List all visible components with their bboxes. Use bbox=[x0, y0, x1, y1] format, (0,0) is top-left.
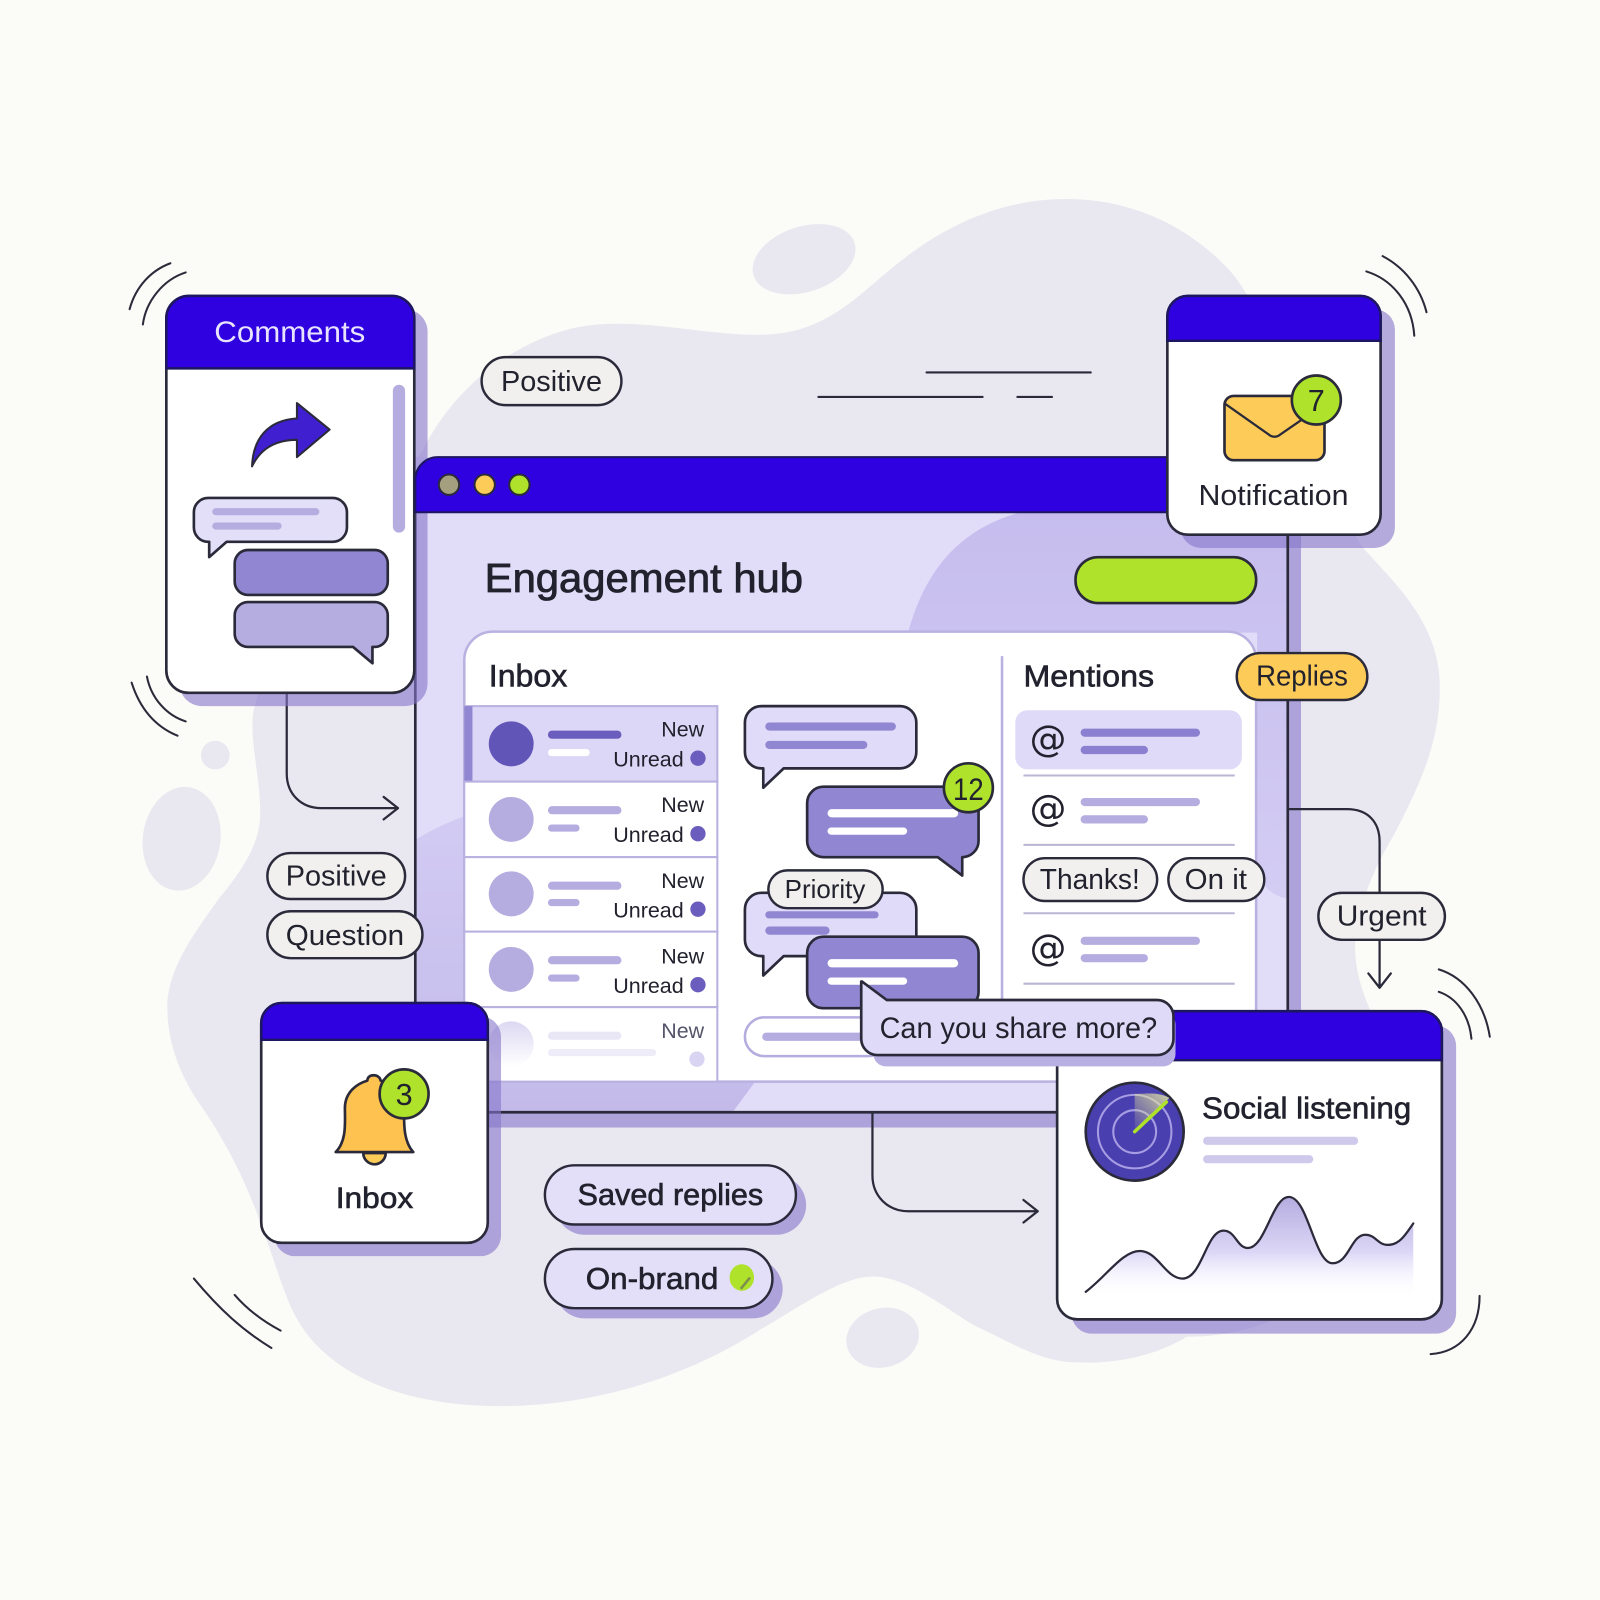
decorative short lines bbox=[818, 372, 1091, 397]
tag: Question bbox=[267, 911, 422, 958]
window outline lines bbox=[415, 512, 1288, 1112]
inbox row 2 bbox=[464, 782, 717, 857]
chip: Thanks! bbox=[1023, 858, 1157, 901]
window control dots bbox=[439, 474, 530, 495]
pill: Saved replies bbox=[545, 1165, 806, 1235]
main window: Engagement hub bbox=[415, 457, 1301, 1128]
icon: envelope bbox=[1224, 396, 1324, 460]
mention row 2: @ bbox=[1030, 786, 1066, 829]
connector: comments to window bbox=[287, 693, 398, 819]
tag: Replies bbox=[1237, 653, 1367, 700]
inbox row 1: New bbox=[661, 718, 705, 742]
inbox heading: Inbox bbox=[489, 658, 568, 694]
badge: 3: 3 bbox=[396, 1078, 413, 1112]
card: Notification bbox=[1167, 296, 1395, 548]
window body bbox=[415, 457, 1288, 1112]
area chart bbox=[1086, 1197, 1413, 1298]
inbox row 4: Unread bbox=[613, 974, 684, 998]
green action button bbox=[1076, 557, 1256, 603]
icon: green leaf bbox=[730, 1264, 754, 1291]
inbox row 1 bbox=[464, 706, 717, 782]
card: Notification: Notification bbox=[1198, 480, 1348, 512]
badge: 7: 7 bbox=[1308, 384, 1325, 418]
card: Comments: Comments bbox=[214, 316, 365, 349]
chat bubble 4 bbox=[807, 937, 979, 1008]
tag: Question: Question bbox=[286, 920, 404, 952]
background blobs bbox=[136, 199, 1440, 1406]
inbox list bbox=[464, 706, 717, 1082]
pill: On-brand: On-brand bbox=[586, 1262, 718, 1296]
icon: radar bbox=[1086, 1083, 1184, 1181]
tag: Priority bbox=[768, 870, 883, 908]
small bubble bbox=[194, 498, 347, 557]
tag: Replies: Replies bbox=[1256, 661, 1348, 693]
mention row highlighted bbox=[1015, 710, 1242, 769]
chat bubble 3 bbox=[745, 893, 916, 976]
connector: replies to urgent bbox=[1288, 809, 1391, 988]
tag: Positive (left) bbox=[267, 853, 405, 899]
icon: bell bbox=[336, 1075, 413, 1164]
inbox row 3 bbox=[464, 857, 717, 932]
inbox row 3: New bbox=[661, 869, 705, 893]
badge: 12 bbox=[944, 763, 993, 812]
tag: Positive (top): Positive bbox=[501, 366, 602, 398]
callout: Can you share more?: Can you share more? bbox=[880, 1012, 1157, 1045]
chip: Thanks!: Thanks! bbox=[1040, 864, 1140, 896]
chat thread bbox=[745, 706, 993, 1056]
icon: share arrow bbox=[252, 403, 330, 466]
chip: On it: On it bbox=[1185, 864, 1247, 896]
scrollbar bbox=[393, 385, 405, 533]
inbox row 5 faded: New bbox=[661, 1019, 705, 1043]
inbox row 3: Unread bbox=[613, 898, 684, 922]
connector: window to social listening bbox=[872, 1112, 1038, 1222]
mention row 3: @ bbox=[1030, 926, 1066, 969]
tag: Urgent: Urgent bbox=[1337, 901, 1427, 933]
mention row 2 bbox=[1030, 786, 1200, 829]
tag: Priority: Priority bbox=[785, 876, 866, 904]
mention row highlighted: @ bbox=[1030, 717, 1066, 760]
window darker shapes bbox=[415, 512, 1288, 1112]
content panel bbox=[464, 632, 1256, 1082]
mention row 3 bbox=[1030, 926, 1200, 969]
purple bubble bbox=[235, 550, 388, 595]
card: Inbox bbox=[261, 1003, 501, 1256]
divider bbox=[1001, 656, 1003, 1005]
lavender bubble bbox=[235, 602, 388, 663]
tag: Positive (left): Positive bbox=[286, 861, 387, 893]
chat bubble 1 bbox=[745, 706, 916, 788]
badge: 12: 12 bbox=[953, 771, 984, 807]
pill: On-brand bbox=[545, 1249, 783, 1318]
tag: Urgent bbox=[1318, 893, 1445, 940]
heading: Engagement hub bbox=[485, 555, 803, 601]
badge: 3 bbox=[380, 1069, 429, 1118]
inbox row 4 bbox=[464, 932, 717, 1007]
card: Social listening bbox=[1057, 1011, 1456, 1334]
tag: Positive (top) bbox=[482, 357, 621, 405]
card: Comments bbox=[166, 296, 428, 706]
badge: 7 bbox=[1292, 376, 1341, 424]
window title bar bbox=[415, 457, 1288, 512]
reply input bbox=[745, 1017, 888, 1056]
mentions heading: Mentions bbox=[1023, 660, 1154, 694]
inbox row 2: New bbox=[661, 793, 705, 817]
motion arcs bbox=[130, 256, 1490, 1354]
mentions list bbox=[1015, 710, 1264, 984]
inbox row 2: Unread bbox=[613, 823, 684, 847]
inbox row 1: Unread bbox=[613, 747, 684, 771]
chip: On it bbox=[1168, 858, 1264, 901]
callout: Can you share more? bbox=[861, 982, 1176, 1066]
card: Inbox: Inbox bbox=[336, 1182, 413, 1215]
pill: Saved replies: Saved replies bbox=[578, 1178, 763, 1212]
inbox row 4: New bbox=[661, 944, 705, 968]
inbox row 5 faded bbox=[464, 1007, 717, 1082]
chat bubble 2 bbox=[807, 787, 979, 876]
window shadow bbox=[429, 490, 1301, 1128]
card: Social listening: Social listening bbox=[1202, 1091, 1411, 1125]
